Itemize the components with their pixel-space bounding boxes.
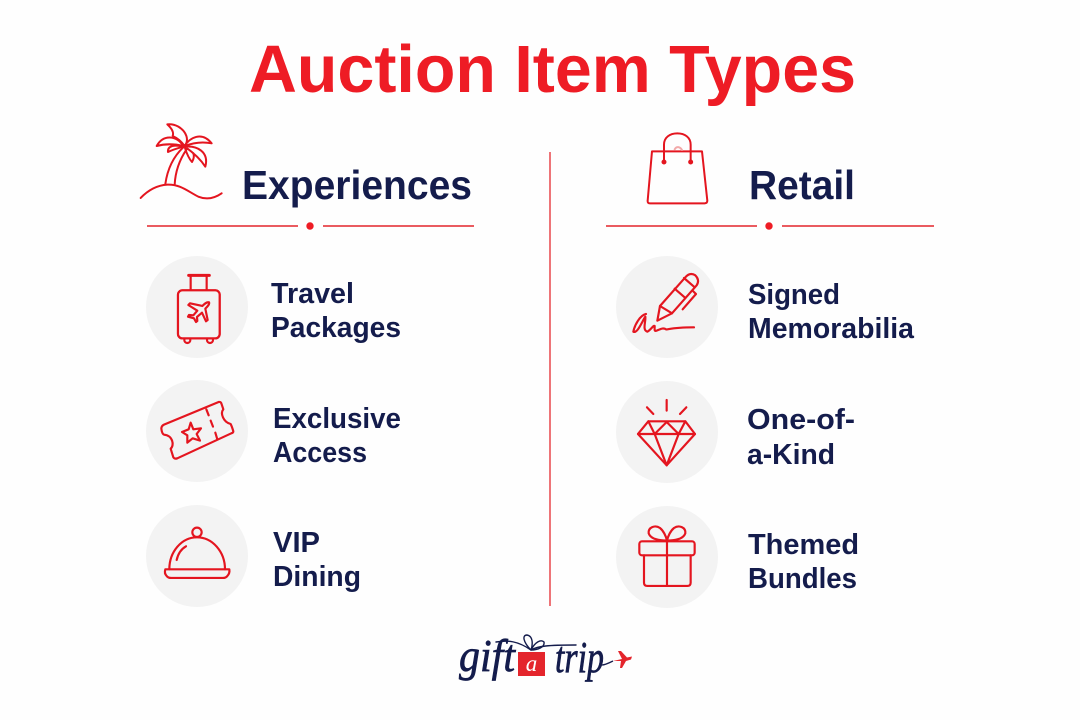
item: travel packages [146,256,401,358]
logo trail [602,661,613,665]
label: one-of-a-kind: a-Kind [747,439,835,471]
label: one-of-a-kind: One-of- [747,404,855,436]
label: signed memorabilia: Signed [748,279,840,311]
panel: retail [606,133,934,608]
center divider [549,152,551,606]
divider: experiences [147,222,474,230]
label: exclusive access: Access [273,437,367,469]
label: exclusive access: Exclusive [273,403,401,435]
heading: retail: Retail [749,162,855,208]
item: vip dining [146,505,361,607]
label: travel packages: Packages [271,312,401,344]
item: exclusive access [146,380,401,482]
logo ribbon [496,635,576,650]
logo: gift a trip [459,630,632,682]
label: signed memorabilia: Memorabilia [748,313,915,345]
label: vip dining: VIP [273,527,320,559]
icon: palm tree island [141,124,222,198]
label: travel packages: Travel [271,278,354,310]
icon: gift box [639,527,695,586]
logo box [518,652,545,676]
icon: pen signature [633,274,698,332]
label: themed bundles: Themed [748,529,859,561]
divider: retail [606,222,934,230]
logo word: gift: gift [459,630,516,681]
title: Auction Item Types [249,32,856,107]
panel: experiences [141,124,474,607]
item: signed memorabilia [616,256,915,358]
icon: shopping bag [648,133,707,203]
item: one-of-a-kind [616,381,855,483]
label: vip dining: Dining [273,561,361,593]
logo plane [613,651,632,668]
logo word: trip: trip [555,633,604,682]
item: themed bundles [616,506,859,608]
label: themed bundles: Bundles [748,563,857,595]
icon: ticket [161,402,233,459]
icon: cloche [165,528,229,578]
icon: diamond [638,400,695,465]
logo letter a: a [526,651,537,676]
heading: experiences: Experiences [242,162,472,208]
icon: luggage with plane [178,275,220,343]
